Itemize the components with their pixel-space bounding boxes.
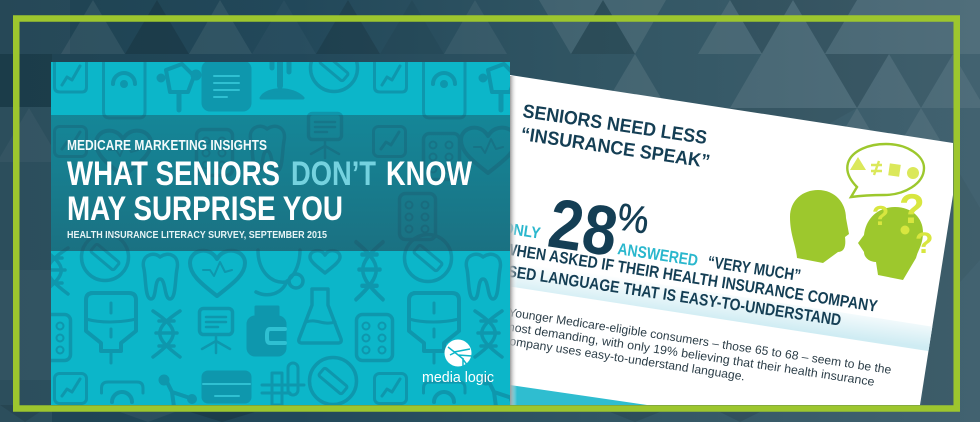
statistic: only 28% answered very much: “VERY MUCH” bbox=[706, 253, 802, 285]
heading: seniors need less insurance speak: SENIORS NEED LESS bbox=[521, 101, 708, 149]
title band bbox=[51, 115, 510, 251]
statistic: only 28% answered very much: ANSWERED bbox=[616, 240, 699, 270]
text: when asked: USED LANGUAGE THAT IS EASY-TO-UNDERSTAND bbox=[496, 261, 842, 330]
text: younger medicare-eligible paragraph: Younger Medicare-eligible consumers – those 65 to 68 – seem to be the bbox=[508, 305, 893, 377]
icon: two heads with speech bubble: ? bbox=[899, 185, 925, 232]
title: what seniors don't know may surprise you bbox=[67, 161, 472, 220]
statistic: only 28% answered very much bbox=[501, 184, 802, 285]
statistic: only 28% answered very much: % bbox=[615, 196, 652, 243]
statistic: only 28% answered very much: ONLY bbox=[501, 220, 542, 243]
text: when asked: WHEN ASKED IF THEIR HEALTH INSURANCE COMPANY bbox=[502, 240, 879, 316]
heading: seniors need less insurance speak: “INSURANCE SPEAK” bbox=[519, 124, 711, 173]
subtitle: survey date: HEALTH INSURANCE LITERACY SURVEY, SEPTEMBER 2015 bbox=[67, 229, 327, 241]
panel: report cover bbox=[51, 62, 510, 405]
logo: media logic bbox=[422, 340, 494, 386]
title: what seniors don't know may surprise you: WHAT SENIORS bbox=[67, 155, 280, 193]
statistic: only 28% answered very much: 28 bbox=[544, 184, 623, 271]
text: younger medicare-eligible paragraph: company uses easy-to-understand language. bbox=[503, 333, 746, 383]
title: what seniors don't know may surprise you: MAY SURPRISE YOU bbox=[67, 190, 343, 228]
cover shadow bbox=[510, 76, 517, 405]
panel: infographic page bbox=[496, 75, 960, 405]
heading: seniors need less insurance speak bbox=[519, 101, 711, 173]
icon pattern bbox=[51, 62, 510, 405]
text: younger medicare-eligible paragraph: most demanding, with only 19% believing that their health insurance bbox=[504, 319, 876, 389]
heading: medicare marketing insights: MEDICARE MARKETING INSIGHTS bbox=[67, 138, 267, 154]
title: what seniors don't know may surprise you: KNOW bbox=[386, 155, 473, 193]
title: what seniors don't know may surprise you: DON’T bbox=[291, 155, 376, 193]
logo: media logic: media logic bbox=[422, 369, 494, 386]
icon: two heads with speech bubble: ? bbox=[872, 200, 889, 231]
icon: two heads with speech bubble bbox=[790, 144, 933, 280]
icon: two heads with speech bubble: ? bbox=[915, 227, 933, 260]
